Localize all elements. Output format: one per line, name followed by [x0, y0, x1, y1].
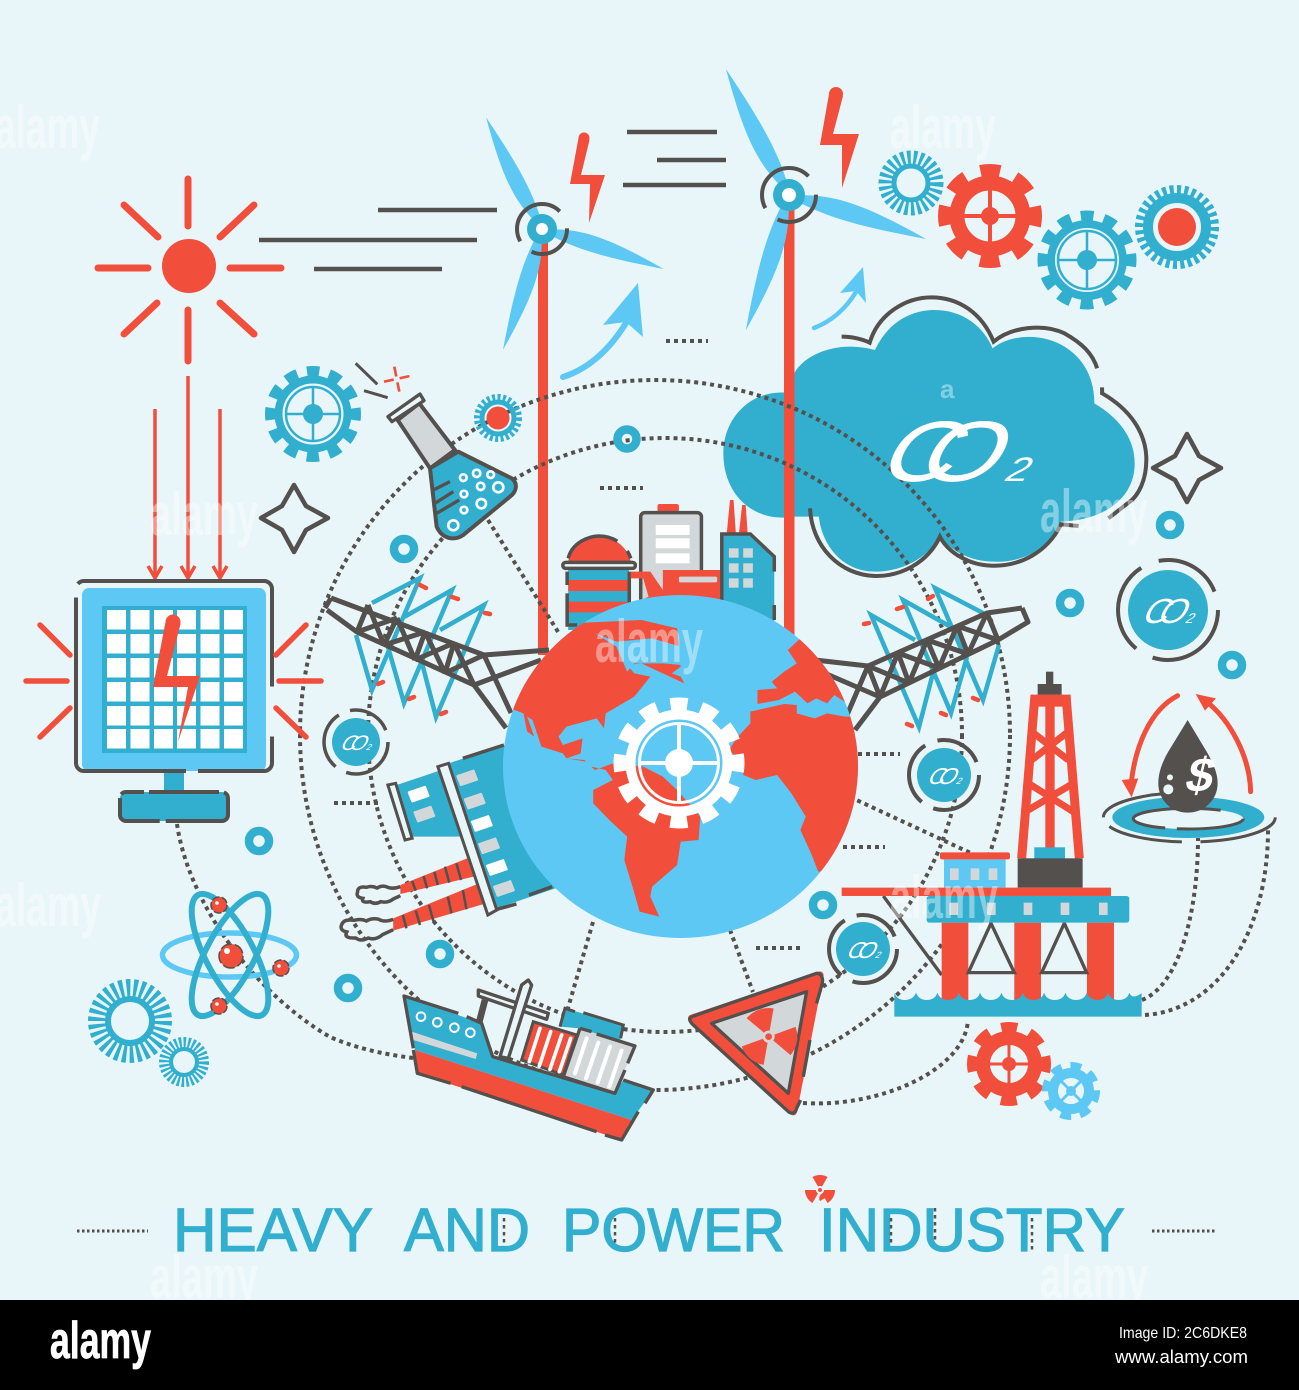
co2 badge bottom: CO2 [842, 938, 890, 964]
title dotted accents [504, 1208, 1032, 1251]
wind turbine left [477, 114, 667, 353]
gear: teal top right [1037, 210, 1137, 310]
co2 badge large right: CO2 [1136, 591, 1209, 630]
hull lower [415, 1050, 632, 1140]
decorative ring markers [249, 430, 1242, 998]
side block [397, 771, 460, 837]
blue arrow left [563, 283, 643, 377]
gear: teal upper left [265, 366, 361, 462]
drop [1158, 720, 1218, 813]
co2 badge bottom [829, 915, 897, 983]
watermarks: alamy [890, 864, 998, 931]
co2 badge left [324, 710, 388, 774]
title radiation icon [807, 1177, 833, 1203]
central and south america [566, 758, 700, 917]
watermarks: alamy [890, 94, 996, 161]
smoke [341, 886, 400, 940]
watermarks: alamy [0, 872, 101, 939]
arrows from sun to panel [148, 376, 227, 578]
blue arrow right [814, 267, 866, 328]
radiation warning sign [690, 973, 823, 1113]
gear: red bottom [966, 1021, 1052, 1107]
cycle arrows [1131, 696, 1178, 785]
sea [894, 993, 1142, 1017]
legs [942, 923, 1114, 1003]
sun rays speed lines [259, 210, 497, 269]
watermarks: alamy [595, 608, 703, 675]
oil puddle [1103, 793, 1275, 842]
co2 badge right [909, 740, 979, 810]
teal container [560, 1008, 623, 1042]
transmission tower right [815, 588, 1028, 730]
star left [261, 485, 328, 552]
title: HEAVY [173, 1196, 373, 1264]
watermarks: alamy [1040, 478, 1148, 545]
star right [1153, 434, 1221, 502]
watermarks: alamy [0, 94, 100, 161]
atom [162, 884, 296, 1026]
lightning bolt left [570, 132, 605, 223]
co2 badge right: CO2 [923, 764, 971, 790]
chimneys [726, 500, 748, 537]
globe [491, 595, 877, 938]
accommodation block [944, 859, 1006, 888]
watermarks: alamy [150, 481, 258, 548]
sun [98, 179, 281, 361]
title: AND [404, 1196, 530, 1264]
watermarks: alamy [1040, 1244, 1148, 1311]
eurasia [758, 640, 845, 704]
watermarks: alamy [150, 1244, 258, 1311]
footer url: www.alamy.com [1114, 1347, 1248, 1367]
industrial skyline behind globe [563, 500, 774, 630]
gear: red top right [937, 163, 1043, 269]
crane [478, 980, 548, 1058]
main hall [449, 740, 570, 908]
chemistry flask [356, 363, 516, 538]
hull outline [404, 996, 653, 1140]
container ship [404, 980, 653, 1140]
oil drop with dollar: $ [1180, 749, 1221, 802]
wind speed lines [623, 132, 726, 185]
gear: small spiked bottom left [166, 1044, 202, 1080]
solar panel monitor [76, 581, 272, 821]
north america [513, 620, 684, 758]
wind turbine poles [538, 205, 794, 655]
offshore oil platform [842, 672, 1142, 1017]
storage tank [563, 536, 635, 630]
deck [842, 888, 1111, 896]
red container [522, 1022, 577, 1075]
grey container [563, 1028, 635, 1093]
solar panel glow rays [26, 625, 321, 737]
support strut [883, 896, 942, 975]
gear: small spiked with red core [478, 398, 518, 438]
chimney stacks [393, 858, 486, 931]
title [173, 1196, 1125, 1264]
title: INDUSTRY [819, 1196, 1125, 1264]
factory with chimneys [341, 740, 570, 940]
hull upper [404, 996, 653, 1120]
transmission tower left [325, 578, 549, 728]
office block [722, 533, 774, 627]
africa [730, 704, 858, 872]
gear: light blue bottom [1046, 1066, 1096, 1116]
footer bar [0, 1300, 1299, 1390]
leg braces [968, 923, 1087, 973]
title flanking dotted lines [77, 1230, 1217, 1232]
gear on globe [613, 697, 745, 829]
footer logo: alamy [50, 1312, 151, 1370]
hull stripe [412, 1032, 477, 1059]
watermarks [0, 94, 1148, 1311]
derrick [1022, 695, 1079, 858]
co2 badge large right [1118, 560, 1218, 660]
oil drop with dollar [1103, 694, 1275, 842]
title: POWER [562, 1196, 785, 1264]
silo [641, 504, 701, 603]
dotted orbit network [177, 341, 1268, 1103]
gear: spiked top right [887, 159, 935, 207]
gear: teal with red core [1140, 190, 1214, 264]
co2 badge left: CO2 [337, 731, 380, 755]
red workshop [631, 570, 720, 603]
arctic lake [595, 633, 681, 672]
co2 cloud [723, 297, 1146, 576]
footer image id: Image ID: 2C6DKE8 [1119, 1325, 1247, 1342]
co2 label in cloud: CO2 [864, 404, 1065, 500]
wind turbine right [716, 66, 929, 334]
portholes [417, 1012, 475, 1037]
gear: large spiked bottom left [99, 990, 161, 1052]
lightning bolt right [820, 87, 859, 188]
watermarks: a [940, 374, 955, 404]
